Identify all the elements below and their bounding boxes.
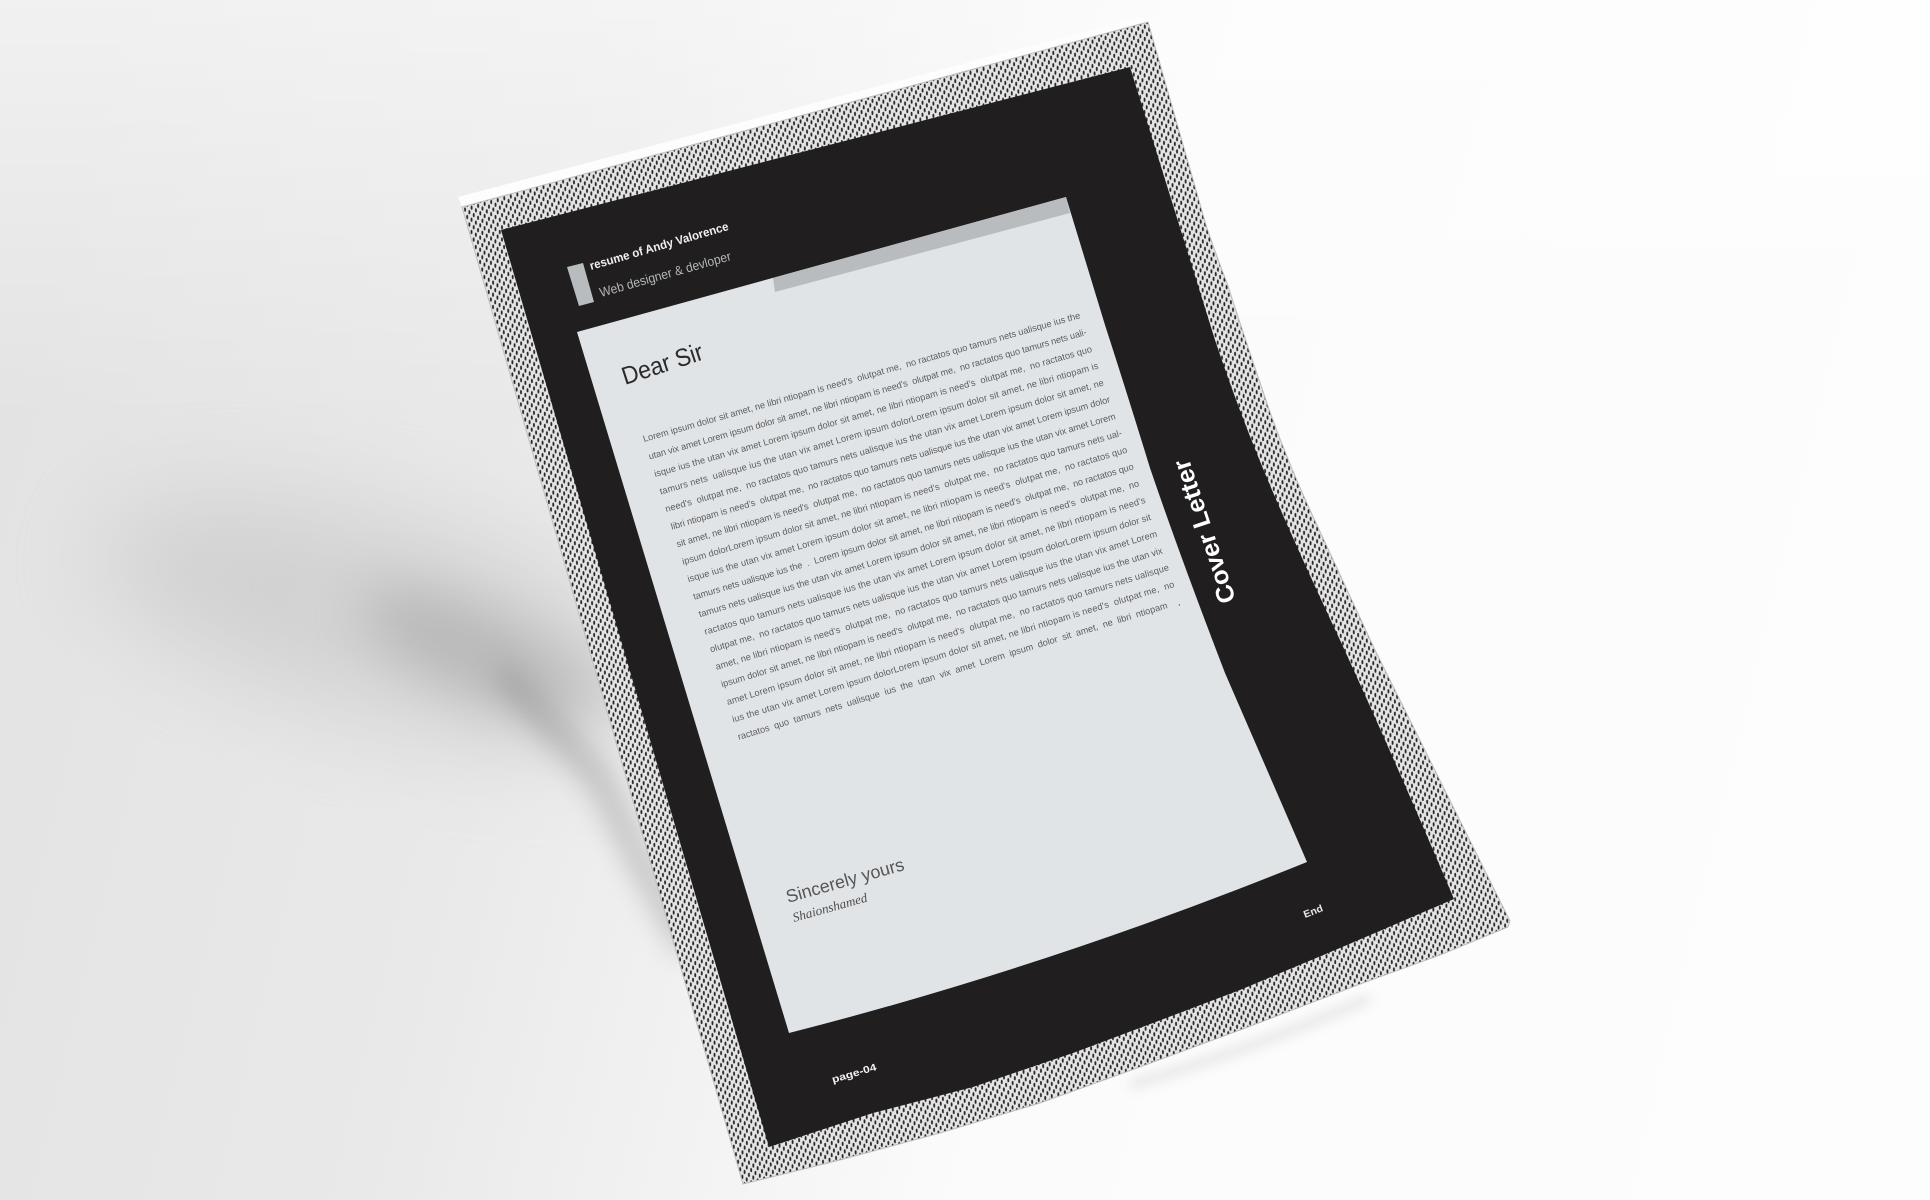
letter body text: tamurs nets ualisque ius the . Lorem ipsum dolor sit amet, ne libri ntiopam is need's olutpat me, no ractatos quo xyxy=(692,462,1135,602)
letter body text: sit amet, ne libri ntiopam is need's olutpat me, no ractatos quo tamurs nets ualisque ius the utan vix amet Lorem xyxy=(675,411,1117,549)
signature: Shaionshamed xyxy=(791,890,869,925)
heading: Dear Sir: Dear Sir xyxy=(618,338,707,391)
letter body text: ius the utan vix amet Lorem ipsum dolorLorem ipsum dolor sit amet, ne libri ntiopam is need's olutpat me, no xyxy=(731,579,1176,724)
letter body text: Lorem ipsum dolor sit amet, ne libri ntiopam is need's olutpat me, no ractatos quo tamurs nets ualisque ius the xyxy=(642,310,1081,444)
letter body text: ractatos quo tamurs nets ualisque ius the utan vix amet Lorem ipsum dolor sit amet, ne libri ntiopam is need's xyxy=(703,495,1147,637)
paper sheet xyxy=(458,17,1510,1184)
letter body text: libri ntiopam is need's olutpat me, no ractatos quo tamurs nets ualisque ius the utan vix amet Lorem ipsum dolor xyxy=(670,394,1111,532)
grey accent band xyxy=(773,197,1070,292)
letter body text: amet Lorem ipsum dolor sit amet, ne libri ntiopam is need's olutpat me, no ractatos quo tamurs nets ualisque xyxy=(725,562,1170,707)
letter body text: ipsum dolor sit amet, ne libri ntiopam is need's olutpat me, no ractatos quo tamurs nets ualisque ius the utan vix xyxy=(720,545,1164,689)
letter body text: isque ius the utan vix amet Lorem ipsum dolor sit amet, ne libri ntiopam is need's olutpat me, no ractatos quo xyxy=(653,344,1093,479)
footer: page number: page-04 xyxy=(831,1062,878,1086)
black panel xyxy=(501,67,1454,1147)
footer: End: End xyxy=(1302,903,1325,921)
white top edge of sheet xyxy=(458,17,1148,207)
letter body text xyxy=(642,310,1180,742)
paper shadow xyxy=(74,446,1370,1085)
light letter panel xyxy=(577,197,1307,1033)
header: resume name: resume of Andy Valorence xyxy=(588,219,730,273)
patterned border xyxy=(462,22,1510,1184)
letter body text: ipsum dolorLorem ipsum dolor sit amet, ne libri ntiopam is need's olutpat me, no ractatos quo tamurs nets ual- xyxy=(681,428,1123,567)
closing: Sincerely yours: Sincerely yours xyxy=(784,854,906,907)
header: job title: Web designer & devloper xyxy=(598,248,733,300)
letter body text: utan vix amet Lorem ipsum dolor sit amet, ne libri ntiopam is need's olutpat me, no ractatos quo tamurs nets uali- xyxy=(647,327,1088,461)
letter body text: ractatos quo tamurs nets ualisque ius the utan vix amet Lorem ipsum dolor sit amet, ne libri ntiopam xyxy=(737,600,1169,742)
letter body text: tamurs nets ualisque ius the utan vix amet Lorem ipsum dolorLorem ipsum dolor sit amet, ne libri ntiopam is xyxy=(658,361,1100,497)
letter body text: need's olutpat me, no ractatos quo tamurs nets ualisque ius the utan vix amet Lorem ipsum dolor sit amet, ne xyxy=(664,378,1105,514)
side title: Cover Letter: Cover Letter xyxy=(1168,456,1242,607)
letter body text: isque ius the utan vix amet Lorem ipsum dolor sit amet, ne libri ntiopam is need's olutpat me, no ractatos quo xyxy=(686,445,1128,584)
letter body text: olutpat me, no ractatos quo tamurs nets ualisque ius the utan vix amet Lorem ipsum dolorLorem ipsum dolor sit xyxy=(709,512,1152,654)
letter body text: amet, ne libri ntiopam is need's olutpat me, no ractatos quo tamurs nets ualisque ius the utan vix amet Lorem xyxy=(714,529,1159,672)
letter body text: tamurs nets ualisque ius the utan vix amet Lorem ipsum dolor sit amet, ne libri ntiopam is need's olutpat me, no xyxy=(698,478,1140,619)
grey header bar xyxy=(567,263,594,306)
